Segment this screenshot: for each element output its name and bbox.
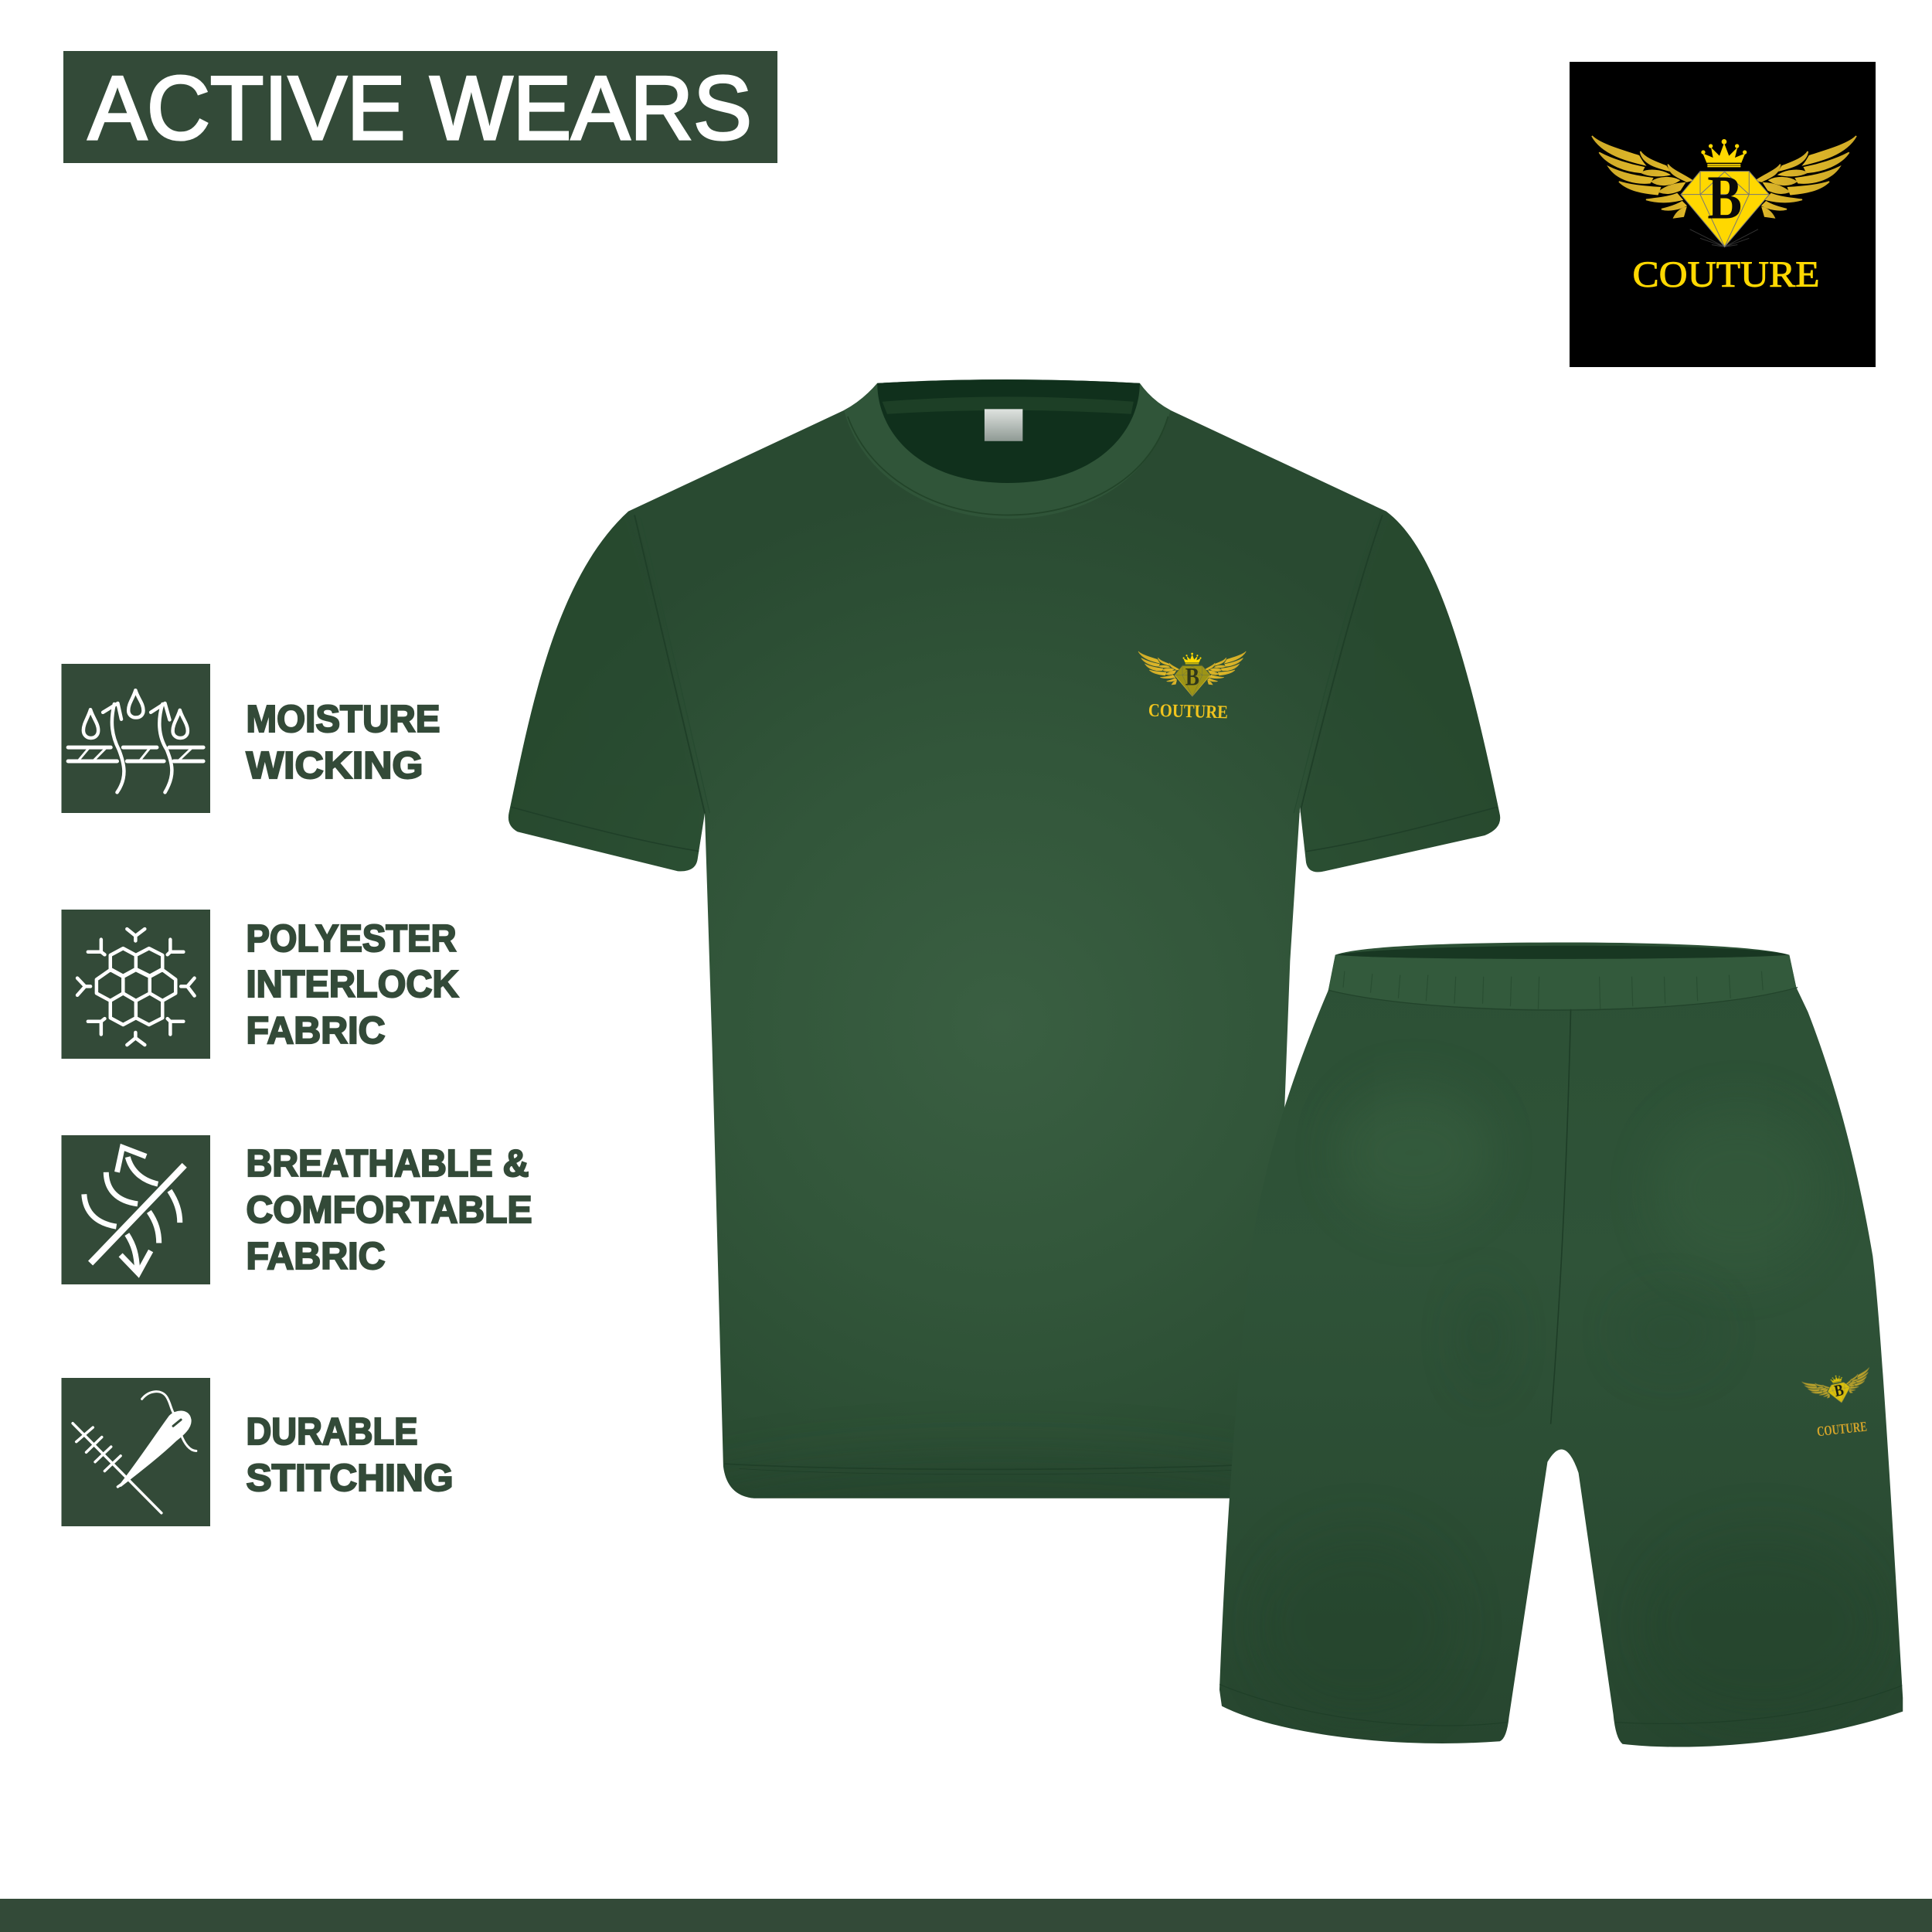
- shorts logo: COUTURE: [1816, 1419, 1868, 1439]
- label: [246, 1411, 453, 1499]
- label: [246, 918, 459, 1052]
- feature: durable stitching: [62, 1378, 453, 1526]
- label: FABRIC: [246, 1010, 385, 1052]
- shorts logo: [1802, 1368, 1875, 1439]
- logo emblem: [1592, 136, 1856, 247]
- label: MOISTURE: [246, 699, 440, 740]
- label: BREATHABLE &: [246, 1143, 529, 1185]
- icon: needle and stitches: [73, 1392, 196, 1513]
- chest logo: COUTURE: [1148, 701, 1228, 723]
- waistband: [1328, 955, 1796, 1009]
- title banner: ACTIVE WEARS: [88, 57, 752, 158]
- icon: airflow through fabric: [84, 1148, 185, 1274]
- t-shirt: [509, 379, 1501, 1498]
- icon: moisture wicking: [68, 690, 203, 792]
- label: POLYESTER: [246, 918, 456, 960]
- label: INTERLOCK: [246, 964, 459, 1005]
- label: STITCHING: [246, 1458, 453, 1499]
- label: [246, 699, 440, 787]
- shorts: [1219, 942, 1905, 1747]
- logo wordmark: COUTURE: [1632, 254, 1819, 295]
- brand logo panel: [1570, 62, 1876, 367]
- collar: [844, 383, 1171, 519]
- waist opening: [1337, 946, 1788, 959]
- feature: polyester interlock fabric: [62, 910, 459, 1059]
- label: WICKING: [246, 745, 423, 787]
- feature: breathable and comfortable fabric: [62, 1135, 532, 1284]
- label: COMFORTABLE: [246, 1189, 532, 1231]
- label: DURABLE: [246, 1411, 417, 1453]
- label: [246, 1143, 532, 1277]
- neck label: [985, 409, 1022, 441]
- neck opening: [877, 379, 1140, 483]
- chest logo: [1138, 651, 1246, 723]
- icon: hexagon fabric: [77, 929, 195, 1045]
- label: FABRIC: [246, 1236, 385, 1277]
- footer bar: [0, 1899, 1932, 1932]
- feature: moisture wicking: [62, 664, 440, 813]
